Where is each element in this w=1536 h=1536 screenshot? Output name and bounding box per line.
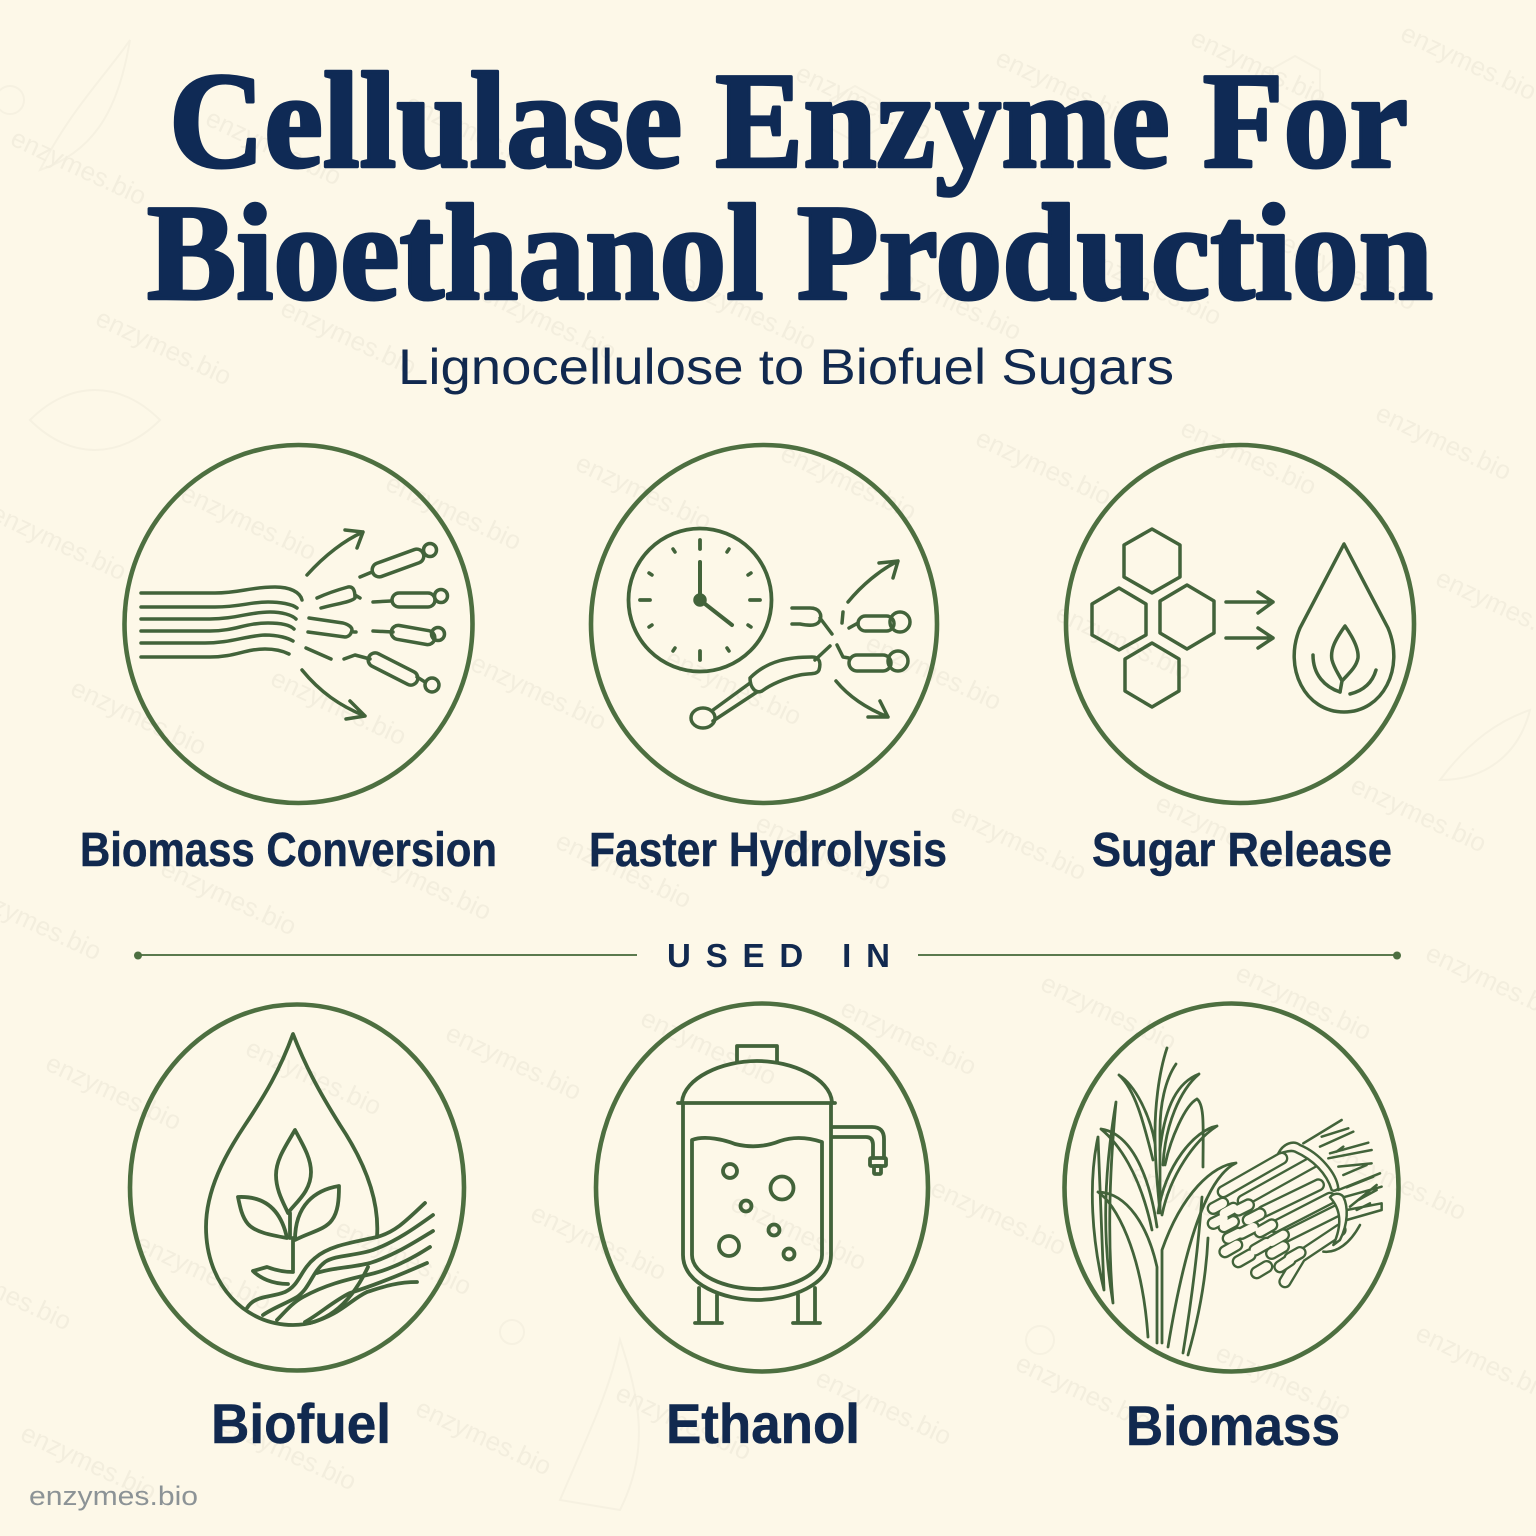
icon: grass plant and bundle bbox=[1092, 1048, 1382, 1355]
watermark pattern: enzymes.bio bbox=[881, 257, 1026, 346]
label: Faster Hydrolysis: Faster Hydrolysis bbox=[589, 824, 947, 877]
watermark pattern: enzymes.bio bbox=[571, 447, 716, 536]
watermark pattern: enzymes.bio bbox=[926, 1172, 1071, 1261]
label: Sugar Release: Sugar Release bbox=[1092, 824, 1392, 877]
watermark pattern: enzymes.bio bbox=[411, 1392, 556, 1481]
watermark pattern: enzymes.bio bbox=[216, 1407, 361, 1496]
panel: biomass conversion bbox=[124, 445, 472, 803]
watermark pattern: enzymes.bio bbox=[676, 267, 821, 356]
watermark pattern: enzymes.bio bbox=[636, 1002, 781, 1091]
watermark pattern: enzymes.bio bbox=[1051, 597, 1196, 686]
watermark pattern: enzymes.bio bbox=[131, 1227, 276, 1316]
watermark pattern: enzymes.bio bbox=[611, 1377, 756, 1466]
icon: fibers breaking into chains bbox=[141, 530, 448, 719]
watermark pattern: enzymes.bio bbox=[1126, 1157, 1271, 1246]
divider: used in bbox=[134, 937, 1401, 974]
watermark pattern: enzymes.bio bbox=[1036, 967, 1181, 1056]
watermark pattern: enzymes.bio bbox=[351, 837, 496, 926]
footer brand: enzymes.bio bbox=[29, 1481, 198, 1511]
watermark pattern: enzymes.bio bbox=[6, 122, 151, 211]
watermark pattern: enzymes.bio bbox=[66, 672, 211, 761]
watermark pattern: enzymes.bio bbox=[811, 1362, 956, 1451]
watermark pattern: enzymes.bio bbox=[1346, 769, 1491, 858]
ring bbox=[1064, 1004, 1398, 1372]
title: Bioethanol Production bbox=[147, 176, 1433, 328]
label: Biomass: Biomass bbox=[1126, 1394, 1340, 1457]
watermark pattern: enzymes.bio bbox=[266, 662, 411, 751]
ring bbox=[591, 445, 937, 803]
watermark pattern: enzymes.bio bbox=[946, 797, 1091, 886]
watermark pattern: enzymes.bio bbox=[551, 825, 696, 914]
watermark pattern: enzymes.bio bbox=[1186, 22, 1331, 111]
bundle bbox=[1213, 1120, 1382, 1282]
panel: ethanol bbox=[596, 1004, 928, 1372]
watermark pattern: enzymes.bio bbox=[751, 807, 896, 896]
watermark pattern: enzymes.bio bbox=[526, 1197, 671, 1286]
watermark pattern: enzymes.bio bbox=[241, 1032, 386, 1121]
watermark pattern: enzymes.bio bbox=[991, 42, 1136, 131]
watermark pattern: enzymes.bio bbox=[1231, 957, 1376, 1046]
icon: clock and breaking chain bbox=[628, 528, 910, 728]
watermark pattern: enzymes.bio bbox=[861, 627, 1006, 716]
panel: biofuel bbox=[130, 1004, 464, 1370]
watermark pattern: enzymes.bio bbox=[1326, 1137, 1471, 1226]
watermark pattern: enzymes.bio bbox=[401, 87, 546, 176]
watermark pattern: enzymes.bio bbox=[1276, 227, 1421, 316]
title bbox=[147, 44, 1433, 328]
panel: faster hydrolysis bbox=[591, 445, 937, 803]
watermark pattern: enzymes.bio bbox=[91, 302, 236, 391]
icon: hexagons to sugar drop bbox=[1092, 529, 1394, 712]
plant bbox=[1092, 1048, 1236, 1355]
watermark pattern: enzymes.bio bbox=[331, 1212, 476, 1301]
ring bbox=[1066, 445, 1414, 803]
watermark pattern: enzymes.bio bbox=[726, 1187, 871, 1276]
watermark pattern: enzymes.bio bbox=[441, 1017, 586, 1106]
watermark pattern: enzymes.bio bbox=[1371, 397, 1516, 486]
label: Ethanol: Ethanol bbox=[666, 1392, 860, 1455]
watermark pattern: enzymes.bio bbox=[776, 437, 921, 526]
label: Biomass Conversion: Biomass Conversion bbox=[80, 824, 497, 877]
watermark pattern: enzymes.bio bbox=[476, 277, 621, 366]
ring bbox=[124, 445, 472, 803]
label: Biofuel: Biofuel bbox=[211, 1392, 391, 1455]
title: Cellulase Enzyme For bbox=[169, 44, 1408, 196]
watermark pattern: enzymes.bio bbox=[381, 467, 526, 556]
panel: biomass bbox=[1064, 1004, 1398, 1372]
watermark pattern: enzymes.bio bbox=[1176, 412, 1321, 501]
watermark pattern: enzymes.bio bbox=[41, 1047, 186, 1136]
watermark pattern: enzymes.bio bbox=[971, 422, 1116, 511]
watermark pattern: enzymes.bio bbox=[201, 102, 346, 191]
watermark pattern: enzymes.bio bbox=[1011, 1347, 1156, 1436]
subtitle: Lignocellulose to Biofuel Sugars bbox=[398, 339, 1174, 395]
watermark pattern: enzymes.bio bbox=[836, 992, 981, 1081]
watermark pattern: enzymes.bio bbox=[661, 642, 806, 731]
divider: used in: USED IN bbox=[667, 937, 890, 974]
watermark pattern: enzymes.bio bbox=[156, 852, 301, 941]
watermark pattern: enzymes.bio bbox=[16, 1417, 161, 1506]
watermark pattern: enzymes.bio bbox=[1151, 787, 1296, 876]
watermark pattern: enzymes.bio bbox=[466, 647, 611, 736]
watermark pattern: enzymes.bio bbox=[1081, 242, 1226, 331]
panel: sugar release bbox=[1066, 445, 1414, 803]
watermark pattern: enzymes.bio bbox=[176, 477, 321, 566]
ring bbox=[130, 1004, 464, 1370]
ring bbox=[596, 1004, 928, 1372]
watermark pattern: enzymes.bio bbox=[276, 292, 421, 381]
watermark pattern: enzymes.bio bbox=[1211, 1337, 1356, 1426]
icon: biofuel drop with plant bbox=[206, 1034, 433, 1325]
icon: fermenter tank bbox=[678, 1046, 886, 1323]
watermark pattern: enzymes.bio bbox=[791, 57, 936, 146]
